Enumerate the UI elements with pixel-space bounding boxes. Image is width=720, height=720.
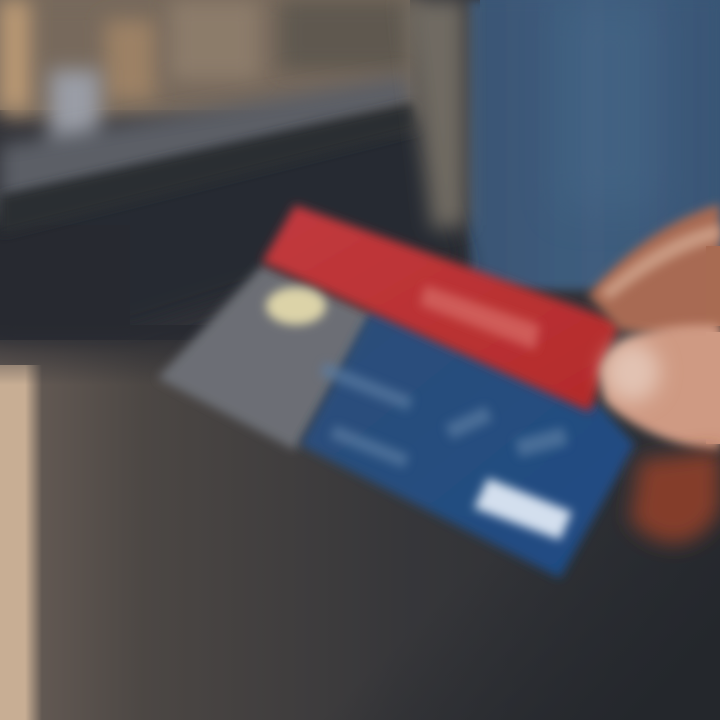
card: white logo — [474, 478, 572, 540]
hand: thumb — [600, 325, 720, 450]
hand holding the card — [588, 204, 720, 543]
background: blue wall panel — [468, 0, 720, 290]
credit card — [158, 205, 635, 578]
background: vertical beige post — [405, 0, 466, 230]
card: red stripe — [262, 205, 620, 412]
card: stripe lettering highlight — [420, 285, 540, 350]
card: blue body — [300, 308, 635, 578]
hand: upper finger — [588, 204, 720, 345]
hand: lower fingers — [630, 450, 720, 543]
card: chip — [266, 287, 326, 325]
card: translucent left section — [158, 265, 375, 450]
background: dark area under shelf — [0, 110, 720, 385]
background: shelf with store items — [0, 0, 420, 235]
card: number details — [320, 362, 568, 468]
